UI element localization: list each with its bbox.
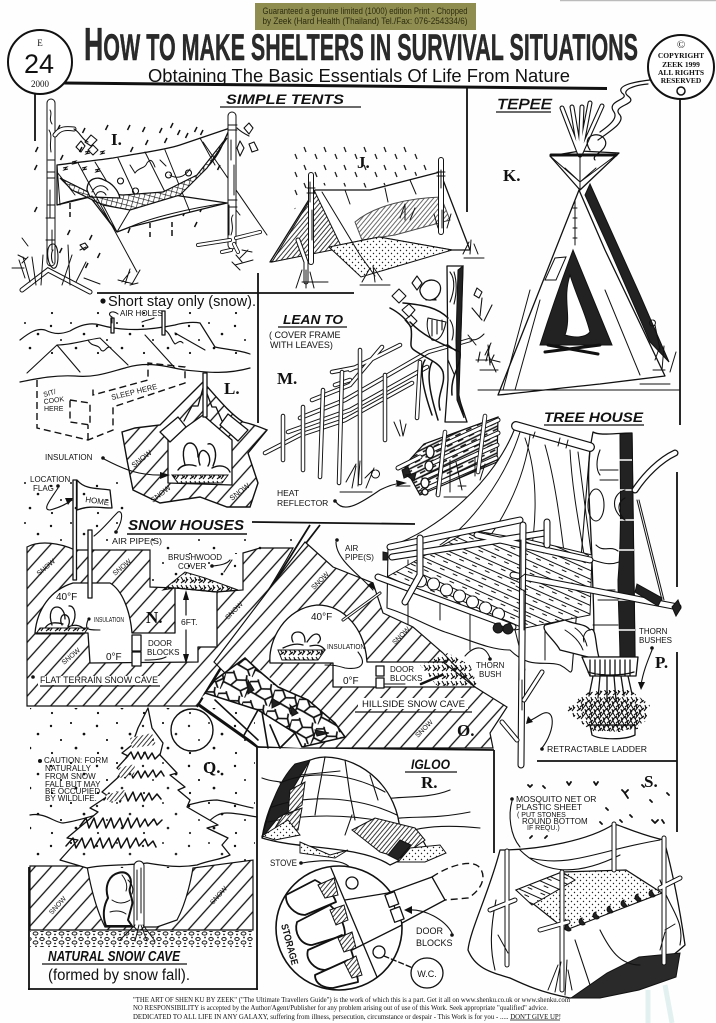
tree with bird and heat reflector log stack <box>390 266 500 497</box>
panel: hillside snow cave O: SNOW <box>391 626 412 646</box>
panel: igloo: R. <box>421 773 438 792</box>
panel: flat terrain snow cave N: SNOW <box>112 558 133 578</box>
badge: copyright: RESERVED <box>661 76 702 85</box>
gold edition label <box>255 3 476 30</box>
panel: natural snow cave Q: (formed by snow fall). <box>48 967 190 984</box>
panel: mosquito net bed S <box>468 772 685 998</box>
panel: tree house: THORN <box>639 627 668 636</box>
panel: hillside snow cave O: BUSH <box>479 670 501 679</box>
panel: flat terrain snow cave N: 40°F <box>56 592 77 603</box>
panel: igloo: BLOCKS <box>416 938 453 948</box>
panel: snow trench L: INSULATION <box>45 453 93 462</box>
panel: tree house: P. <box>655 653 668 672</box>
panel: natural snow cave Q: CAUTION: FORM <box>44 756 108 765</box>
panel: hillside snow cave O: SNOW <box>414 719 435 739</box>
panel: hillside snow cave O: DOOR <box>390 665 414 674</box>
panel: igloo: STOVE <box>270 858 297 868</box>
panel: lean to: REFLECTOR <box>277 498 328 508</box>
footer note <box>133 996 571 1021</box>
panel: snow trench L: SNOW <box>149 483 173 505</box>
panel: lean to <box>265 312 470 508</box>
panel: mosquito net bed S: S. <box>644 772 658 791</box>
panel: hillside snow cave O: PIPE(S) <box>345 553 374 562</box>
panel: lean to: M. <box>277 369 297 388</box>
panel: igloo: DOOR <box>416 926 444 936</box>
panel: tepee <box>468 80 680 395</box>
panel: flat terrain snow cave N: AIR PIPE(S) <box>112 536 162 546</box>
tent J: ridge tarp: J. <box>357 153 370 172</box>
panel: flat terrain snow cave N: SNOW HOUSES <box>128 517 244 534</box>
panel: snow trench L: SLEEP HERE <box>110 382 158 402</box>
panel: mosquito net bed S: ROUND BOTTOM <box>522 817 588 826</box>
panel: tree house: BUSHES <box>639 636 672 645</box>
panel: snow trench L: SNOW <box>130 448 154 470</box>
panel: lean to: HEAT <box>277 488 299 498</box>
panel: flat terrain snow cave N: FLAT TERRAIN SNOW CAVE <box>40 675 158 685</box>
panel: natural snow cave Q: BY WILDLIFE. <box>45 794 97 803</box>
tent I: hammock with tarp: I. <box>111 130 122 149</box>
panel: snow trench L: SIT/ <box>43 389 57 399</box>
panel: tepee: TEPEE <box>497 96 553 113</box>
panel: natural snow cave Q: FALL BUT MAY <box>45 780 101 789</box>
panel: natural snow cave Q: SNOW <box>209 885 229 906</box>
panel: lean to: WITH LEAVES) <box>270 340 333 350</box>
panel: tree house <box>378 426 681 765</box>
panel: snow trench L <box>20 309 267 507</box>
panel: flat terrain snow cave N: SNOW <box>61 647 82 667</box>
panel: flat terrain snow cave N: COVER <box>178 562 207 571</box>
footer note: NO RESPONSIBILITY is accepted by the Author/Agent/Publisher for any problem arising out of use of this Work. Seek appropriate "qualified" advice. <box>133 1004 548 1012</box>
panel: flat terrain snow cave N: 6FT. <box>181 617 198 627</box>
tent J: ridge tarp <box>232 142 484 288</box>
panel: flat terrain snow cave N: SNOW <box>224 601 245 621</box>
panel: mosquito net bed S: IF REQU.) <box>527 825 560 832</box>
badge: copyright: ALL RIGHTS <box>658 68 704 77</box>
tent I: hammock with tarp <box>12 103 267 292</box>
panel: flat terrain snow cave N: INSULATION <box>94 617 124 624</box>
badge: page number: 2000 <box>31 79 50 89</box>
panel: flat terrain snow cave N: BRUSHWOOD <box>168 553 222 562</box>
footer note: DEDICATED TO ALL LIFE IN ANY GALAXY, suffering from illness, persecution, circumstance or despair - This Work is for you - ..... DON'T GIVE UP! <box>133 1013 561 1021</box>
panel: igloo: W.C. <box>417 969 437 979</box>
note: short stay: Short stay only (snow). <box>108 294 256 310</box>
panel: igloo <box>262 756 483 990</box>
panel: hillside snow cave O: SNOW <box>311 571 331 591</box>
panel: mosquito net bed S: MOSQUITO NET OR <box>516 794 596 804</box>
panel: snow trench L: COOK <box>43 396 65 406</box>
panel: flat terrain snow cave N: DOOR <box>148 639 172 648</box>
panel: flat terrain snow cave N <box>22 475 300 706</box>
panel: mosquito net bed S: ( PUT STONES <box>517 812 566 819</box>
panel: flat terrain snow cave N: HOME <box>85 495 110 507</box>
badge: copyright: ZEEK 1999 <box>662 60 700 69</box>
panel: tepee: K. <box>503 166 520 185</box>
panel: hillside snow cave O: O. <box>457 721 474 740</box>
panel: snow trench L: AIR HOLES <box>120 309 163 318</box>
badge: copyright: © <box>677 39 685 51</box>
panel: flat terrain snow cave N: LOCATION <box>30 475 71 484</box>
badge: page number: E <box>37 38 43 48</box>
panel: tree house: RETRACTABLE LADDER <box>547 744 647 754</box>
heading: tree house: TREE HOUSE <box>544 410 644 425</box>
panel: igloo: IGLOO <box>411 756 450 772</box>
panel: natural snow cave Q: NATURAL SNOW CAVE <box>48 949 181 965</box>
panel: snow trench L: L. <box>224 379 240 398</box>
footer note: "THE ART OF SHEN KU BY ZEEK" ("The Ultimate Travellers Guide") is the work of which this is a part. Get it all on www.shenku.co.uk or www.shenku.com <box>133 996 571 1004</box>
panel: natural snow cave Q: NATURALLY <box>45 764 92 773</box>
subtitle: Obtaining The Basic Essentials Of Life From Nature <box>148 66 570 86</box>
panel: hillside snow cave O: HILLSIDE SNOW CAVE <box>362 699 465 709</box>
panel: flat terrain snow cave N: FLAG <box>33 484 54 493</box>
panel: hillside snow cave O: THORN <box>476 661 505 670</box>
panel: hillside snow cave O: AIR <box>345 544 359 553</box>
panel: flat terrain snow cave N: 0°F <box>106 652 122 663</box>
badge: copyright <box>648 35 714 99</box>
panel: hillside snow cave O <box>202 538 507 748</box>
panel: natural snow cave Q <box>30 708 257 984</box>
panel: hillside snow cave O: 40°F <box>311 612 332 623</box>
panel: snow trench L: SNOW <box>228 481 252 503</box>
panel: hillside snow cave O: 0°F <box>343 676 359 687</box>
badge: copyright: COPYRIGHT <box>658 51 704 60</box>
panel: natural snow cave Q: BE OCCUPIED <box>45 787 100 796</box>
panel: mosquito net bed S: PLASTIC SHEET <box>516 802 582 812</box>
panel: flat terrain snow cave N: N. <box>146 608 163 627</box>
gold edition label: by Zeek (Hard Health (Thailand) Tel./Fax: 076-254334/6) <box>262 16 468 26</box>
panel: hillside snow cave O: BLOCKS <box>390 674 422 683</box>
scan marks at paper edge <box>560 0 716 1023</box>
heading: simple tents: SIMPLE TENTS <box>226 91 345 107</box>
panel: natural snow cave Q: FROM SNOW <box>45 772 96 781</box>
panel: natural snow cave Q: SNOW <box>48 895 68 916</box>
gold edition label: Guaranteed a genuine limited (1000) edition Print - Chopped <box>262 6 468 16</box>
panel: flat terrain snow cave N: BLOCKS <box>147 648 179 657</box>
badge: page number <box>8 30 72 94</box>
panel: igloo: STORAGE <box>278 923 300 967</box>
panel: hillside snow cave O: INSULATION <box>327 644 365 651</box>
panel: lean to: LEAN TO <box>283 312 343 327</box>
panel: snow trench L: HERE <box>44 406 64 413</box>
panel: natural snow cave Q: Q. <box>203 758 220 777</box>
badge: page number: 24 <box>24 49 54 79</box>
panel: flat terrain snow cave N: SNOW <box>36 558 57 578</box>
panel: lean to: ( COVER FRAME <box>269 330 341 340</box>
